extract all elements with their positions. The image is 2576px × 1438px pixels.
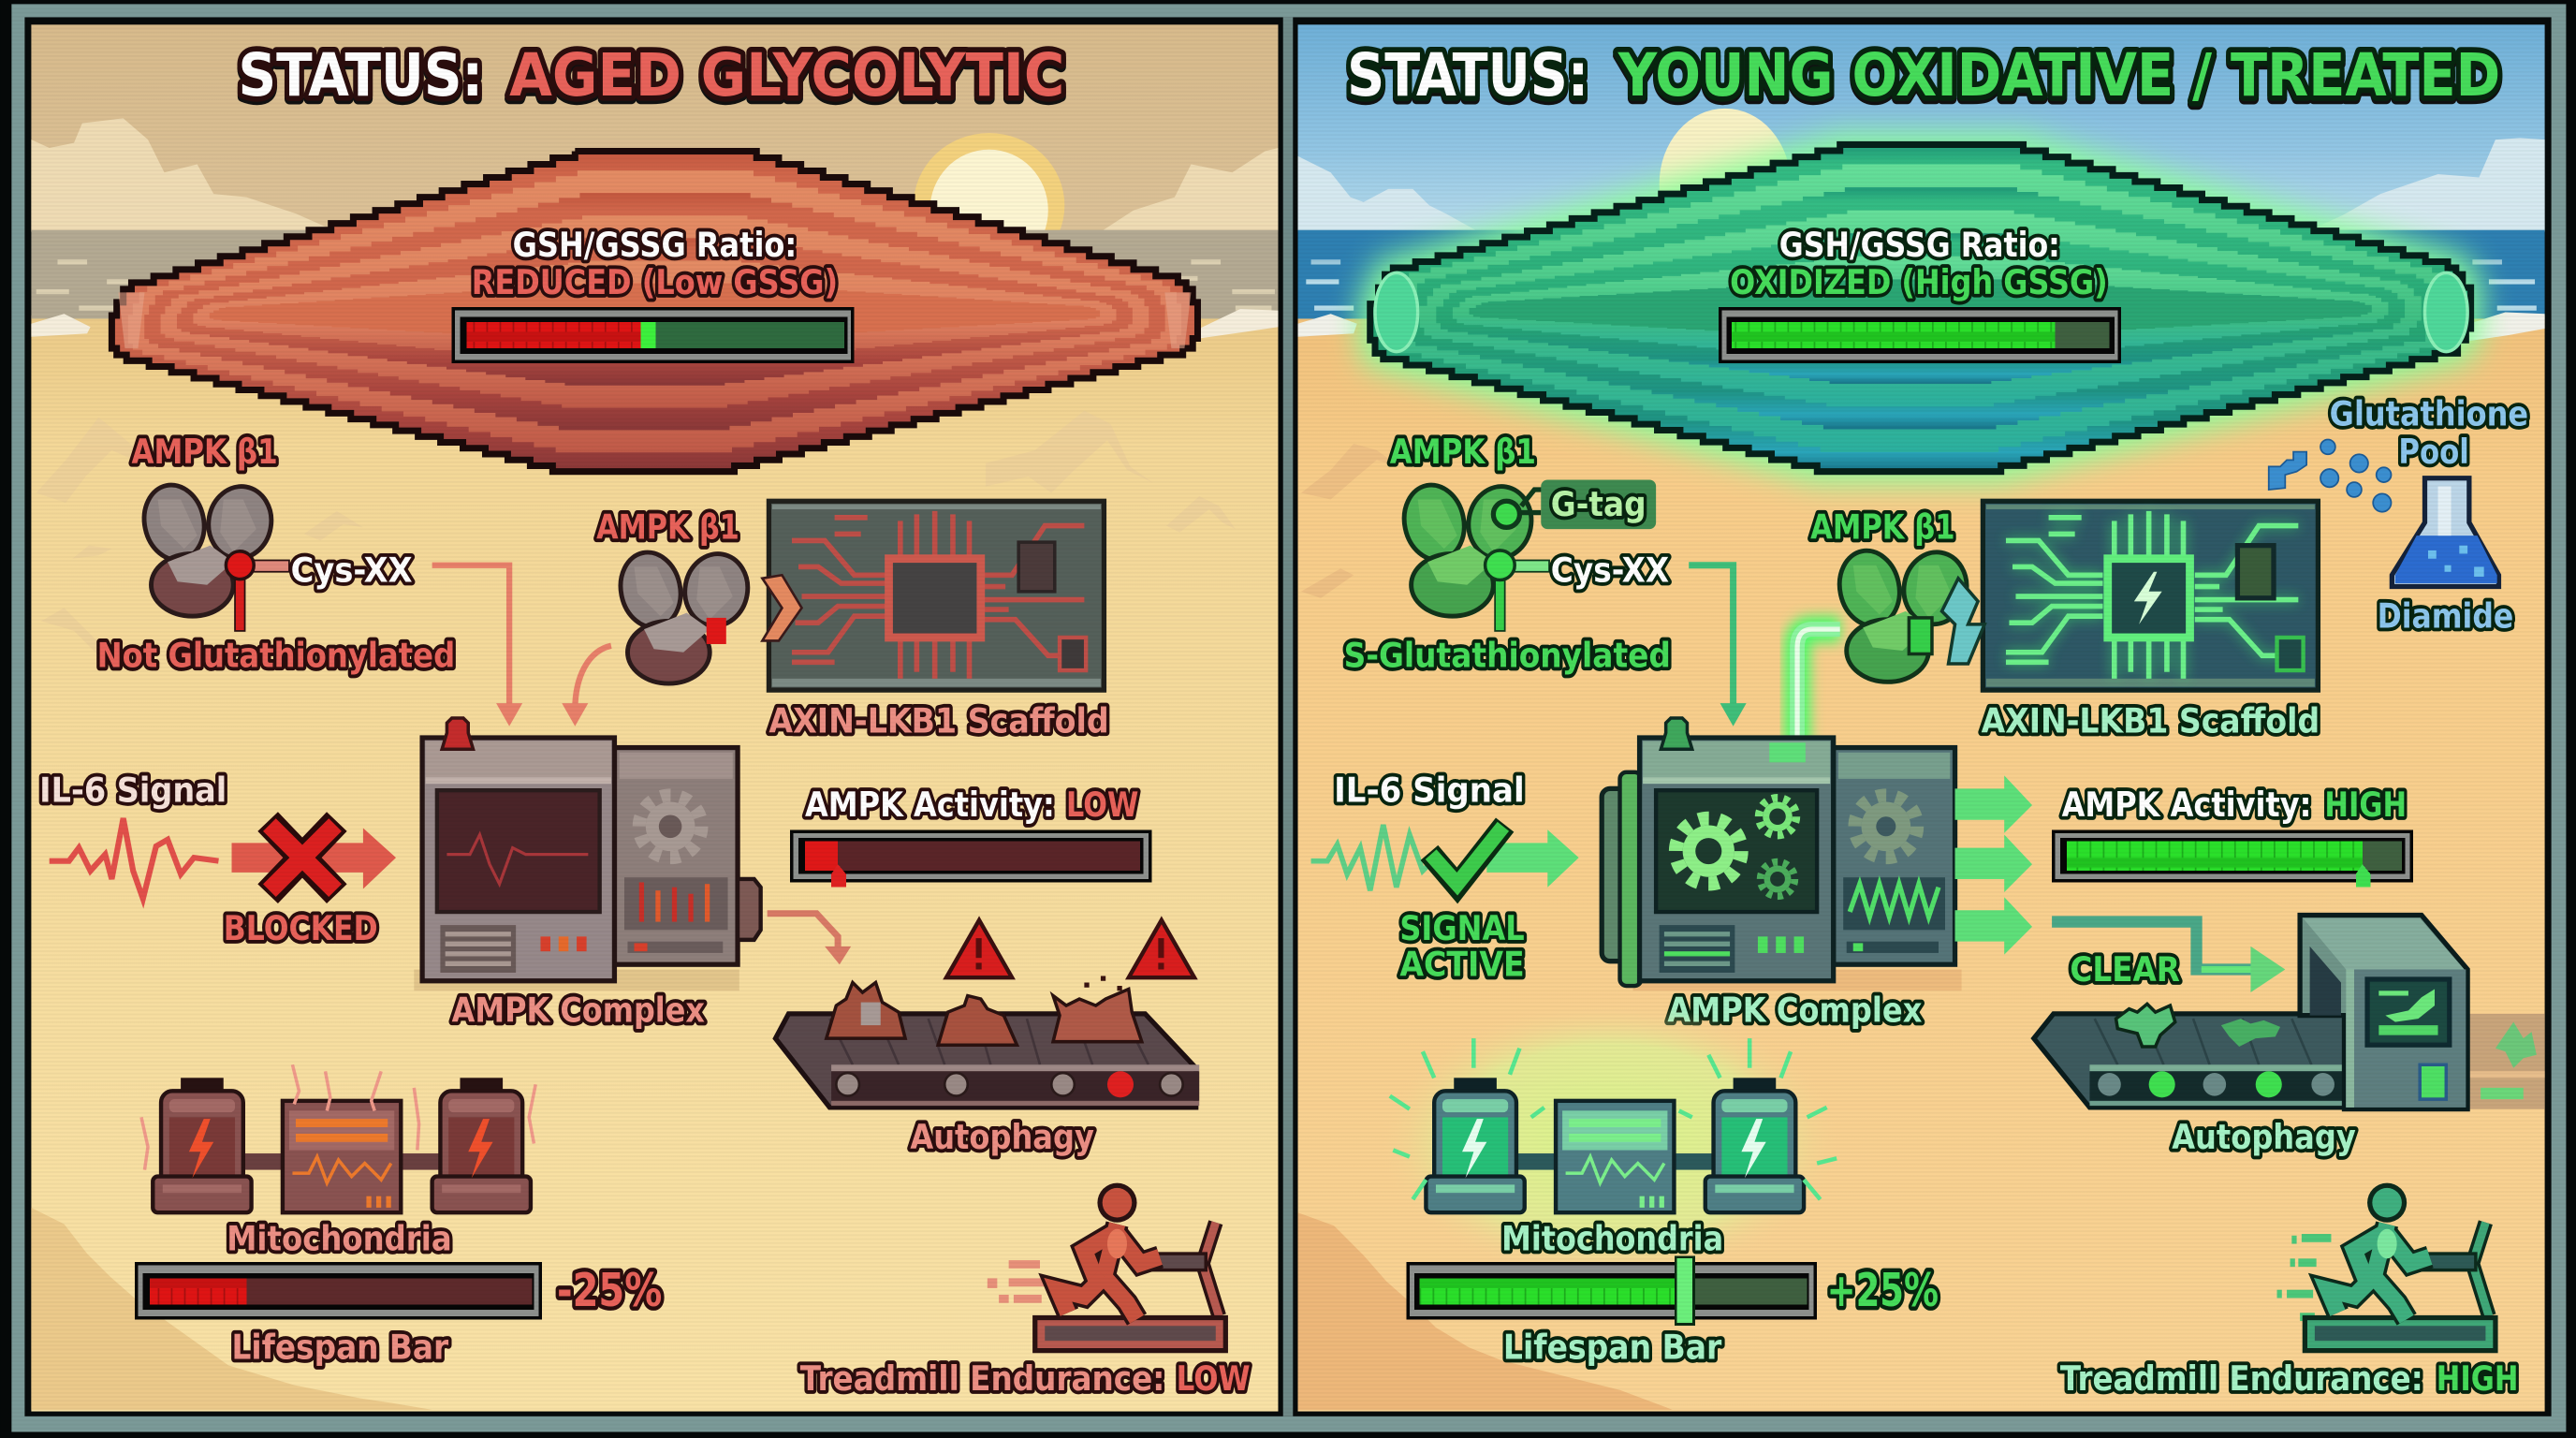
- scanner: autophagy machine: [2300, 916, 2467, 1109]
- panel: aged glycolytic: [31, 24, 1278, 1412]
- label: S-glutathionylated: S-Glutathionylated: [1344, 636, 1671, 676]
- GSH/GSSG bar aged: [452, 307, 855, 363]
- heading: status young oxidative treated: STATUS:: [1347, 40, 1588, 110]
- conveyor: autophagy aged: [775, 976, 1199, 1108]
- label: AMPK complex young: AMPK Complex: [1667, 990, 1923, 1031]
- icon: IL-6 waveform young: [1311, 825, 1432, 890]
- label: blocked: BLOCKED: [224, 908, 378, 948]
- label: glutathione pool: Pool: [2398, 432, 2469, 472]
- label: AXIN-LKB1 scaffold young: AXIN-LKB1 Scaffold: [1982, 701, 2320, 741]
- GSH label young: OXIDIZED (High GSSG): [1730, 262, 2108, 302]
- label: lifespan bar young: Lifespan Bar: [1503, 1327, 1722, 1367]
- label: glutathione pool: [2330, 394, 2528, 472]
- icon: mitochondria young: [1380, 1003, 1840, 1282]
- GSH/GSSG bar young: [1719, 307, 2121, 363]
- right beach background: [1298, 24, 2545, 1412]
- label: mitochondria young: Mitochondria: [1501, 1219, 1723, 1259]
- label: Cys-XX: Cys-XX: [291, 550, 413, 590]
- arrow: active signal: [1486, 829, 1579, 888]
- label: lifespan bar aged: Lifespan Bar: [232, 1327, 449, 1367]
- chip: AXIN-LKB1 scaffold young: [1983, 501, 2318, 690]
- icon: treadmill runner aged: [988, 1183, 1225, 1351]
- label: autophagy young: Autophagy: [2172, 1117, 2356, 1157]
- protein: AMPK beta1 not glutathionylated: [138, 479, 289, 631]
- icon: glutathione droplets: [2269, 439, 2392, 512]
- label: AMPK beta1: AMPK β1: [131, 432, 278, 472]
- label: treadmill endurance high: HIGH: [2437, 1358, 2519, 1399]
- heading: status aged glycolytic: AGED GLYCOLYTIC: [509, 40, 1064, 110]
- heading: status aged glycolytic: STATUS:: [239, 40, 483, 110]
- label: autophagy aged: Autophagy: [910, 1117, 1094, 1157]
- icon: mitochondria aged: [141, 1064, 535, 1212]
- label: IL-6 signal aged: IL-6 Signal: [39, 770, 227, 810]
- protein: AMPK beta1 at scaffold young: [1833, 545, 1984, 682]
- label: glutathione pool: Glutathione: [2330, 394, 2528, 434]
- icon: treadmill runner young: [2277, 1183, 2496, 1351]
- icon: red X: [268, 822, 337, 894]
- bar: lifespan young: [1406, 1257, 1817, 1325]
- bar: AMPK activity high: [2052, 829, 2413, 888]
- icon: IL-6 waveform aged: [50, 818, 218, 899]
- protein: AMPK beta1 at scaffold: [614, 547, 802, 683]
- value: plus 25 percent: +25%: [1827, 1263, 1939, 1317]
- bar: lifespan aged: [135, 1262, 542, 1319]
- label: treadmill endurance low: Treadmill Endurance:: [800, 1358, 1164, 1399]
- label: clear: CLEAR: [2070, 949, 2180, 990]
- left beach background: [31, 24, 1278, 1412]
- icon: check mark: [1429, 825, 1505, 886]
- label: AMPK beta1 second: AMPK β1: [596, 507, 739, 548]
- label: diamide: Diamide: [2378, 595, 2513, 636]
- label: signal active: [1399, 908, 1525, 984]
- label: signal active: SIGNAL: [1399, 908, 1525, 948]
- value: minus 25 percent: -25%: [557, 1263, 662, 1317]
- machine: AMPK complex aged: [414, 718, 761, 990]
- label: AMPK complex aged: AMPK Complex: [452, 990, 705, 1031]
- output: cleared material: [2467, 1014, 2545, 1109]
- label: AMPK activity low: LOW: [1066, 785, 1138, 825]
- panel: young oxidative treated: [1298, 24, 2545, 1412]
- chip: AXIN-LKB1 scaffold aged: [768, 501, 1104, 690]
- label: signal active: ACTIVE: [1399, 944, 1525, 984]
- label: AMPK activity high: AMPK Activity:: [2062, 785, 2311, 825]
- GSH label aged: GSH/GSSG Ratio:: [513, 225, 797, 265]
- label: Cys-XX young: Cys-XX: [1551, 550, 1669, 590]
- machine: AMPK complex young: [1602, 718, 1962, 990]
- muscle: aged: [111, 151, 1197, 472]
- arrows: AMPK outputs: [1955, 775, 2032, 955]
- label: AMPK activity high: HIGH: [2324, 785, 2407, 825]
- arrow: complex to autophagy young: [2052, 922, 2285, 992]
- conveyor: autophagy young: [2034, 1004, 2349, 1108]
- label: AXIN-LKB1 scaffold: AXIN-LKB1 Scaffold: [768, 701, 1109, 741]
- arrow: blocked signal: [232, 829, 396, 888]
- bar: AMPK activity low: [790, 829, 1151, 888]
- heading: status aged glycolytic: [239, 40, 1064, 110]
- arrow: scaffold protein to complex: [562, 646, 611, 726]
- protein: AMPK beta1 glutathionylated: [1398, 479, 1549, 631]
- label: AMPK beta1 second young: AMPK β1: [1810, 507, 1955, 548]
- label: IL-6 signal young: IL-6 Signal: [1334, 770, 1525, 810]
- label: not glutathionylated: Not Glutathionylated: [97, 636, 455, 676]
- tag: G-tag: G-tag: [1551, 484, 1647, 524]
- arrow: protein to AMPK complex: [432, 565, 522, 726]
- heading: status young oxidative treated: YOUNG OXIDATIVE / TREATED: [1617, 40, 2500, 110]
- GSH label aged: [472, 225, 838, 302]
- label: treadmill endurance high: Treadmill Endurance:: [2060, 1358, 2423, 1399]
- arrow: protein to complex young: [1689, 565, 1747, 726]
- label: mitochondria aged: Mitochondria: [227, 1219, 452, 1259]
- GSH label young: [1730, 225, 2108, 302]
- label: AMPK activity low: AMPK Activity:: [805, 785, 1055, 825]
- icon: warning triangles: [946, 920, 1194, 977]
- GSH label young: GSH/GSSG Ratio:: [1779, 225, 2060, 265]
- arrow: glowing scaffold link: [1797, 629, 1840, 748]
- GSH label aged: REDUCED (Low GSSG): [472, 262, 838, 302]
- muscle: young: [1370, 144, 2471, 472]
- icon: diamide flask: [2392, 478, 2498, 587]
- label: AMPK beta1 young: AMPK β1: [1390, 432, 1536, 472]
- label: treadmill endurance low: LOW: [1177, 1358, 1251, 1399]
- arrow: complex to autophagy aged: [768, 914, 851, 964]
